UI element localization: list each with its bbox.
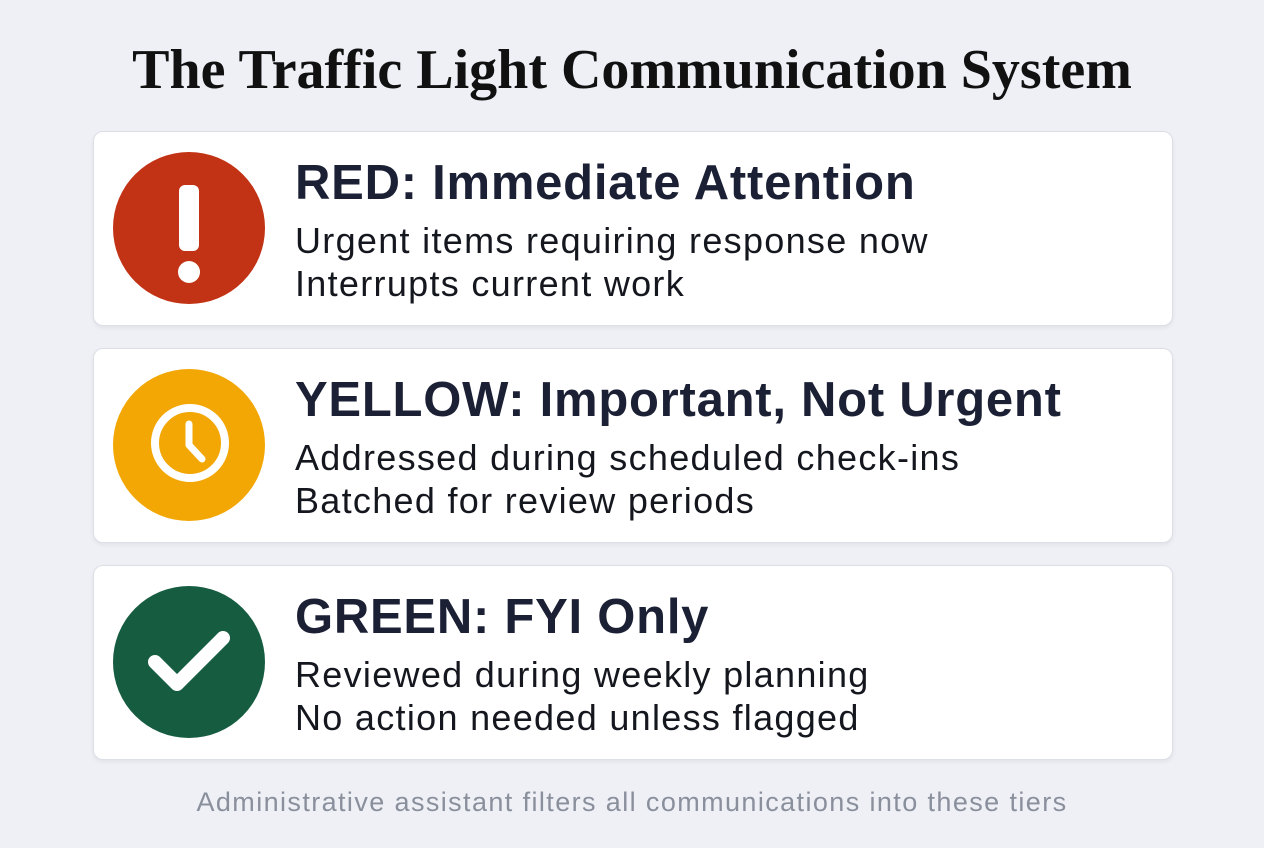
panel: yellow (93, 348, 1173, 543)
text: green (295, 654, 870, 738)
title: The Traffic Light Communication System (132, 39, 1132, 101)
text: green: Reviewed during weekly planning (295, 654, 870, 695)
heading: red: RED: Immediate Attention (295, 156, 916, 210)
footer note: Administrative assistant filters all communications into these tiers (196, 787, 1068, 817)
text: yellow: Batched for review periods (295, 480, 755, 521)
icon: clock (113, 369, 265, 521)
text: red: Interrupts current work (295, 263, 685, 304)
text: yellow (295, 437, 960, 521)
heading: yellow: YELLOW: Important, Not Urgent (295, 373, 1062, 427)
panel: green (93, 565, 1173, 760)
heading: green: GREEN: FYI Only (295, 590, 709, 644)
text: green: No action needed unless flagged (295, 697, 860, 738)
icon: exclamation (113, 152, 265, 304)
text: yellow: Addressed during scheduled check-ins (295, 437, 960, 478)
icon: checkmark (113, 586, 265, 738)
text: red: Urgent items requiring response now (295, 220, 929, 261)
panel: red (93, 131, 1173, 326)
text: red (295, 220, 929, 304)
